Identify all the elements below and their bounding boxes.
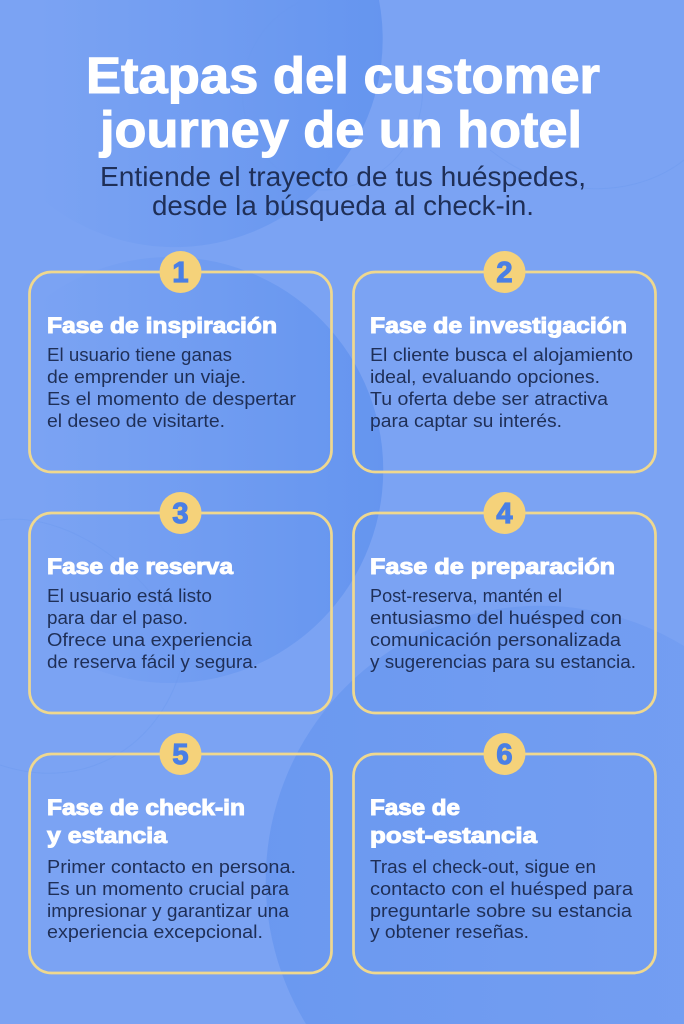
panel: fase 4 bbox=[354, 492, 656, 713]
heading: fase de post-estancia: Fase de bbox=[370, 795, 460, 820]
number badge 5 bbox=[160, 733, 202, 775]
body text bbox=[370, 586, 636, 672]
panel: fase 5 bbox=[30, 733, 332, 973]
number badge 1: 1 bbox=[172, 257, 189, 289]
body text: experiencia excepcional. bbox=[47, 922, 263, 942]
heading: fase de check-in y estancia: y estancia bbox=[47, 823, 168, 848]
number badge 6: 6 bbox=[496, 739, 513, 771]
body text: Primer contacto en persona. bbox=[47, 857, 296, 877]
body text: contacto con el huésped para bbox=[370, 879, 634, 899]
body text: entusiasmo del huésped con bbox=[370, 608, 622, 628]
panel: fase 6 bbox=[354, 733, 656, 973]
title bbox=[86, 47, 600, 158]
number badge 5: 5 bbox=[172, 739, 189, 771]
body text: El cliente busca el alojamiento bbox=[370, 345, 633, 365]
heading: fase de post-estancia: post-estancia bbox=[370, 823, 538, 848]
number badge 4: 4 bbox=[496, 498, 513, 530]
body text bbox=[47, 857, 296, 942]
body text: y sugerencias para su estancia. bbox=[370, 652, 636, 672]
body text: impresionar y garantizar una bbox=[47, 901, 290, 921]
body text: de emprender un viaje. bbox=[47, 367, 246, 387]
body text: Tu oferta debe ser atractiva bbox=[370, 389, 609, 409]
body text: preguntarle sobre su estancia bbox=[370, 901, 633, 921]
body text: El usuario está listo bbox=[47, 586, 212, 606]
body text: Es un momento crucial para bbox=[47, 879, 290, 899]
body text bbox=[370, 345, 633, 431]
panel: fase 1 bbox=[30, 251, 332, 472]
body text: comunicación personalizada bbox=[370, 630, 622, 650]
heading: fase de preparación: Fase de preparación bbox=[370, 554, 615, 579]
body text: Ofrece una experiencia bbox=[47, 630, 253, 650]
body text: el deseo de visitarte. bbox=[47, 411, 225, 431]
body text: Post-reserva, mantén el bbox=[370, 586, 562, 606]
number badge 4 bbox=[484, 492, 526, 534]
body text bbox=[47, 345, 296, 431]
subtitle bbox=[100, 161, 586, 221]
body text bbox=[370, 857, 634, 942]
title: journey de un hotel bbox=[99, 101, 582, 158]
heading: fase de check-in y estancia bbox=[47, 795, 245, 848]
body text bbox=[47, 586, 258, 672]
body text: y obtener reseñas. bbox=[370, 922, 529, 942]
heading: fase de inspiración: Fase de inspiración bbox=[47, 313, 277, 338]
number badge 2: 2 bbox=[496, 257, 513, 289]
body text: Es el momento de despertar bbox=[47, 389, 296, 409]
heading: fase de investigación: Fase de investigación bbox=[370, 313, 627, 338]
heading: fase de check-in y estancia: Fase de check-in bbox=[47, 795, 245, 820]
heading: fase de post-estancia bbox=[370, 795, 538, 848]
body text: ideal, evaluando opciones. bbox=[370, 367, 600, 387]
number badge 3: 3 bbox=[172, 498, 189, 530]
number badge 3 bbox=[160, 492, 202, 534]
number badge 2 bbox=[484, 251, 526, 293]
panel: fase 2 bbox=[354, 251, 656, 472]
subtitle: desde la búsqueda al check-in. bbox=[152, 190, 534, 221]
title: Etapas del customer bbox=[86, 47, 600, 104]
body text: El usuario tiene ganas bbox=[47, 345, 232, 365]
body text: de reserva fácil y segura. bbox=[47, 652, 258, 672]
heading: fase de reserva: Fase de reserva bbox=[47, 554, 234, 579]
body text: para dar el paso. bbox=[47, 608, 188, 628]
panel: fase 3 bbox=[30, 492, 332, 713]
subtitle: Entiende el trayecto de tus huéspedes, bbox=[100, 161, 586, 192]
body text: Tras el check-out, sigue en bbox=[370, 857, 596, 877]
number badge 1 bbox=[160, 251, 202, 293]
number badge 6 bbox=[484, 733, 526, 775]
body text: para captar su interés. bbox=[370, 411, 562, 431]
